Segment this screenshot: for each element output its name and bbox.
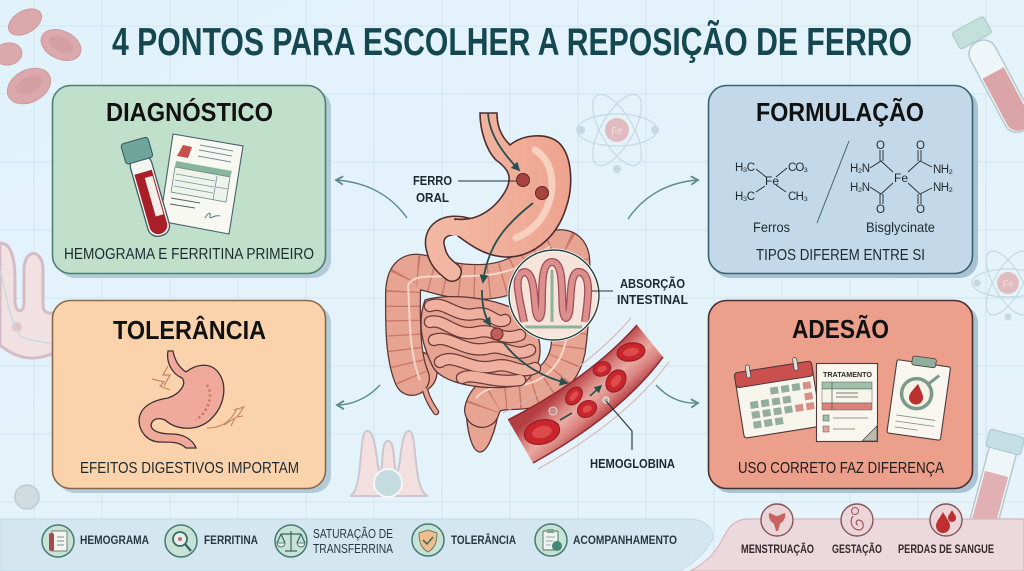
icon: treatment sheet: TRATAMENTO (823, 370, 872, 379)
chemical formula: bisglycinate: O (876, 204, 885, 216)
decoration: test tube top right (952, 16, 1024, 139)
heading: formulação: FORMULAÇÃO (756, 97, 924, 127)
arrow: to adesão (656, 385, 698, 403)
icon: ferritina (165, 525, 197, 557)
label: tolerância: TOLERÂNCIA (451, 532, 516, 547)
chemical formula: ferros: CO₃ (788, 162, 808, 174)
pathway arrow stomach to intestine (483, 203, 533, 282)
decoration: bubble (15, 485, 39, 509)
stomach (455, 113, 571, 257)
large intestine (403, 246, 573, 410)
chemical formula: bisglycinate: H₂N (850, 182, 870, 194)
icon: lab report (160, 134, 243, 234)
chemical formula: ferros: CH₃ (788, 191, 808, 203)
arrow: to formulação (628, 180, 698, 219)
chemical formula: bisglycinate: O (916, 204, 925, 216)
icon: acompanhamento clipboard (535, 524, 567, 556)
callout: hemoglobina (590, 401, 675, 471)
callout: hemoglobina: HEMOGLOBINA (590, 457, 675, 471)
caption: diagnóstico: HEMOGRAMA E FERRITINA PRIMEIRO (64, 246, 314, 263)
small intestine (421, 297, 540, 388)
panel: tolerância (52, 300, 331, 493)
decoration: atom centre (577, 87, 658, 173)
callout: absorção intestinal: ABSORÇÃO (620, 276, 685, 291)
decoration: villi centre (350, 431, 428, 497)
caption: tolerância: EFEITOS DIGESTIVOS IMPORTAM (80, 460, 299, 477)
chemical formula: ferros: Fe (765, 174, 779, 188)
chemical formula: bisglycinate: O (916, 140, 925, 152)
heading: diagnóstico: DIAGNÓSTICO (106, 97, 273, 127)
chemical formula: bisglycinate: H₂N (850, 163, 870, 175)
heading: adesão: ADESÃO (792, 314, 889, 344)
iron pill: stomach 1 (516, 174, 530, 186)
callout: ferro oral: FERRO (413, 174, 452, 188)
label: hemograma: HEMOGRAMA (80, 533, 149, 547)
heading: tolerância: TOLERÂNCIA (113, 315, 266, 345)
duodenum (435, 225, 470, 272)
decoration: atom centre: Fe (611, 126, 623, 137)
icon: gestação (841, 504, 873, 536)
chemical formula: ferros: Ferros (753, 219, 790, 235)
callout: ferro oral (413, 174, 516, 205)
label: saturação de transferrina: TRANSFERRINA (313, 542, 394, 556)
callout: absorção intestinal: INTESTINAL (617, 293, 688, 307)
callout: absorção intestinal (592, 276, 688, 307)
decoration: atom right (972, 245, 1024, 321)
blood vessel (503, 318, 669, 469)
red blood cells (522, 341, 646, 448)
icon: transferrina scale (275, 525, 307, 557)
chemical formula: ferros (735, 162, 808, 235)
chemical formula: ferros: H₃C (735, 191, 755, 203)
icon: clipboard blood drop (887, 354, 951, 440)
icon: perdas de sangue (930, 504, 962, 536)
chemical formula: bisglycinate: NH₂ (933, 182, 953, 194)
pathway arrow intestine (482, 290, 490, 325)
arrow: absorption to blood (503, 342, 567, 383)
panel: diagnóstico (52, 86, 331, 278)
icon: calendar (733, 355, 821, 438)
icon: treatment sheet (816, 364, 878, 442)
appendix (425, 390, 436, 412)
icon: menstruação (761, 504, 793, 536)
panel: formulação (708, 86, 978, 278)
appendix fill (425, 390, 436, 412)
chemical formula: bisglycinate: NH₂ (933, 164, 953, 176)
decoration: test tube bottom right (953, 429, 1024, 571)
footer band: risk factors (690, 504, 1024, 571)
chemical formula: bisglycinate: O (876, 140, 885, 152)
chemical formula: bisglycinate (850, 140, 953, 235)
footer band: exams (0, 519, 713, 571)
label: menstruação: MENSTRUAÇÃO (741, 541, 814, 556)
caption: adesão: USO CORRETO FAZ DIFERENÇA (738, 460, 944, 477)
icon: tolerância shield (412, 524, 444, 556)
decoration: atom right: Fe (1003, 279, 1013, 289)
arrow: to tolerância (337, 385, 380, 405)
label: saturação de transferrina (313, 527, 394, 556)
divider slash (817, 141, 849, 223)
arrow: to diagnóstico (336, 180, 407, 218)
icon: blood tube (121, 137, 175, 240)
label: ferritina: FERRITINA (204, 533, 258, 547)
rectum (466, 403, 499, 452)
stomach highlight (516, 150, 552, 238)
caption: formulação: TIPOS DIFEREM ENTRE SI (756, 247, 925, 264)
duodenum join (448, 227, 464, 229)
iron pill: intestine (491, 328, 503, 340)
chemical formula: bisglycinate: Bisglycinate (866, 219, 935, 235)
label: acompanhamento: ACOMPANHAMENTO (573, 533, 677, 547)
illustration: digestive system (395, 113, 573, 452)
decoration: villi left (0, 243, 56, 358)
label: saturação de transferrina: SATURAÇÃO DE (313, 527, 393, 541)
decoration: red blood cells (0, 3, 86, 111)
label: perdas de sangue: PERDAS DE SANGUE (898, 542, 994, 556)
cecum (395, 351, 437, 393)
magnifier: intestinal villi (509, 250, 599, 340)
chemical formula: bisglycinate: Fe (894, 171, 908, 185)
icon: irritated stomach (139, 351, 244, 448)
iron pill: stomach 2 (536, 186, 548, 200)
label: gestação: GESTAÇÃO (832, 541, 882, 556)
panel: adesão (708, 300, 978, 493)
callout: ferro oral: ORAL (416, 191, 449, 205)
chemical formula: ferros: H₃C (735, 162, 755, 174)
esophagus centre line (488, 113, 519, 170)
icon: hemograma (42, 525, 74, 557)
